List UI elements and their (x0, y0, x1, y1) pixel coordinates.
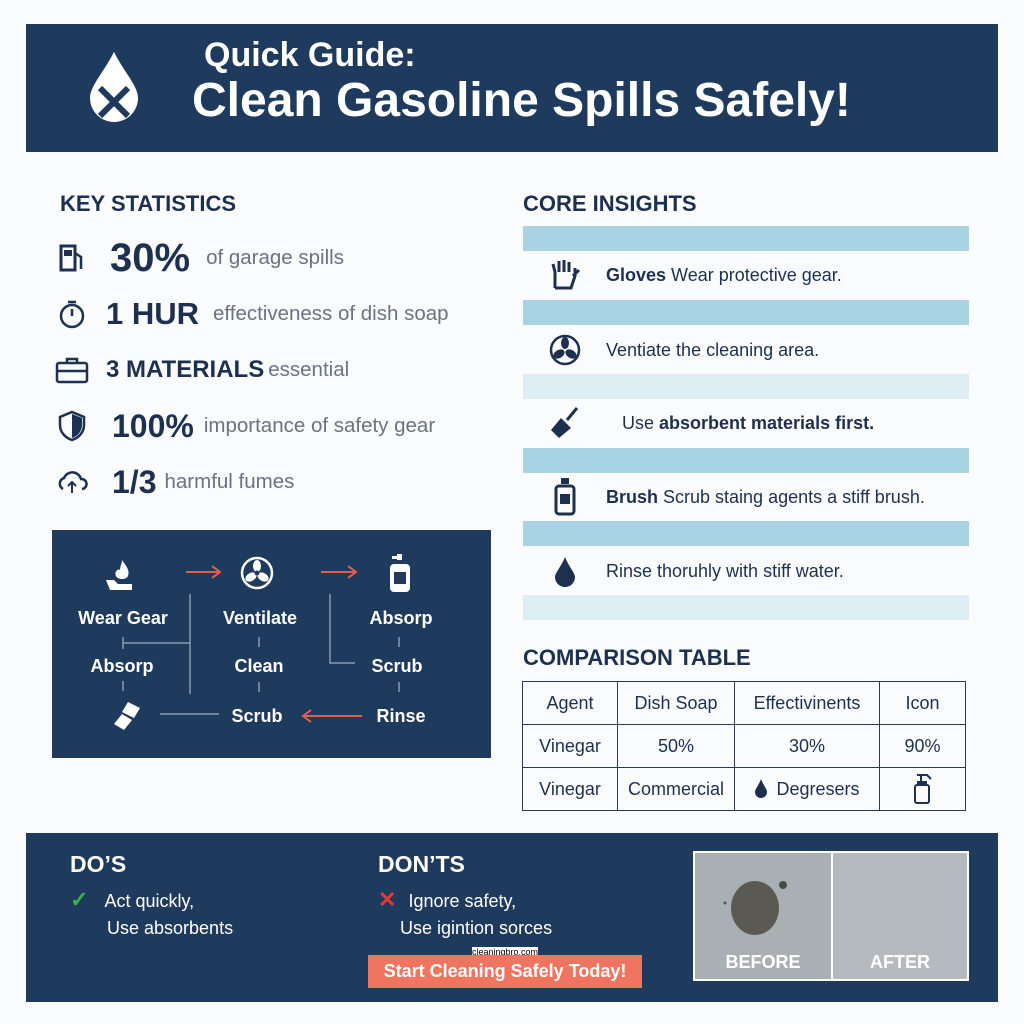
call to action button (368, 955, 642, 988)
flow labels: Scrub (371, 656, 423, 676)
header banner (26, 24, 998, 152)
comparison table: Vinegar (539, 778, 601, 798)
insight: ventilate: Ventiate the cleaning area. (606, 340, 819, 360)
insight: rinse (555, 557, 844, 587)
stat 3: 3 MATERIALS (106, 356, 264, 383)
do's: Use absorbents (107, 918, 233, 938)
comparison table: Vinegar (539, 736, 601, 756)
comparison table: Dish Soap (634, 692, 718, 712)
don'ts: ✕ Ignore safety, (378, 887, 516, 912)
comparison table: 30% (789, 736, 825, 756)
before/after images: AFTER (870, 952, 930, 972)
comparison table: 50% (658, 736, 694, 756)
title: Clean Gasoline Spills Safely! (192, 74, 851, 127)
flow labels: Ventilate (223, 608, 297, 628)
insight: brush: Brush Scrub staing agents a stiff brush. (606, 486, 925, 506)
stat 1: 30% (110, 236, 190, 280)
insight: absorbent (551, 407, 874, 438)
heading: key statistics: KEY STATISTICS (60, 191, 236, 216)
icon: drop with X (90, 52, 138, 122)
stat 5 (58, 464, 294, 500)
stat 4 (58, 408, 435, 444)
heading: comparison table: COMPARISON TABLE (523, 645, 751, 670)
insight: rinse: Rinse thoruhly with stiff water. (606, 560, 844, 580)
comparison table: Effectivinents (754, 692, 860, 712)
comparison table: 90% (904, 736, 941, 756)
icon: fan (240, 556, 274, 590)
before/after images: BEFORE (725, 952, 800, 972)
panel: process flow (52, 530, 491, 758)
stat 3: essential (268, 358, 349, 381)
comparison table: Icon (905, 692, 940, 712)
insight: gloves (552, 260, 842, 290)
insight: brush (554, 478, 925, 516)
insight: gloves: Gloves Wear protective gear. (606, 264, 842, 284)
don'ts: DON’TS (378, 851, 465, 877)
stat 4: 100% (112, 408, 194, 444)
stat 2 (60, 296, 449, 331)
icon: bottle (390, 554, 410, 592)
title (192, 36, 851, 127)
stat 4: importance of safety gear (204, 414, 435, 437)
flow labels: Wear Gear (78, 608, 168, 628)
bottom panel (26, 833, 998, 1002)
flow labels: Scrub (231, 706, 283, 726)
stats list (56, 236, 449, 500)
don'ts (378, 851, 552, 938)
title: Quick Guide: (204, 36, 416, 74)
comparison table: Agent (546, 692, 594, 712)
heading: core insights: CORE INSIGHTS (523, 191, 697, 216)
do's (70, 851, 233, 938)
insight: absorbent: Use absorbent materials first. (622, 412, 874, 432)
do's: ✓ Act quickly, (70, 887, 194, 912)
stat 2: 1 HUR (106, 296, 199, 331)
call to action button: Start Cleaning Safely Today! (384, 961, 626, 981)
stat 5: 1/3 (112, 464, 156, 500)
icon: brush (114, 702, 140, 730)
stat 1: of garage spills (206, 246, 344, 269)
flow labels (78, 608, 432, 726)
flow labels: Rinse (376, 706, 426, 726)
flow labels: Clean (234, 656, 284, 676)
before/after images (693, 851, 969, 981)
stripes (523, 226, 969, 251)
flow labels: Absorp (370, 608, 432, 628)
comparison table: Degresers (776, 779, 860, 799)
flow labels: Absorp (90, 656, 154, 676)
stat 2: effectiveness of dish soap (213, 302, 449, 325)
stat 1 (60, 236, 344, 280)
stat 5: harmful fumes (164, 470, 294, 493)
do's: DO’S (70, 851, 126, 877)
icon: hand with flame (106, 560, 132, 590)
stat 3 (56, 356, 349, 384)
don'ts: Use igintion sorces (400, 918, 552, 938)
insight: ventilate (550, 334, 819, 366)
comparison table: Commercial (628, 778, 724, 798)
watermark: cleaningbro.com (472, 947, 538, 957)
comparison table (522, 681, 966, 811)
